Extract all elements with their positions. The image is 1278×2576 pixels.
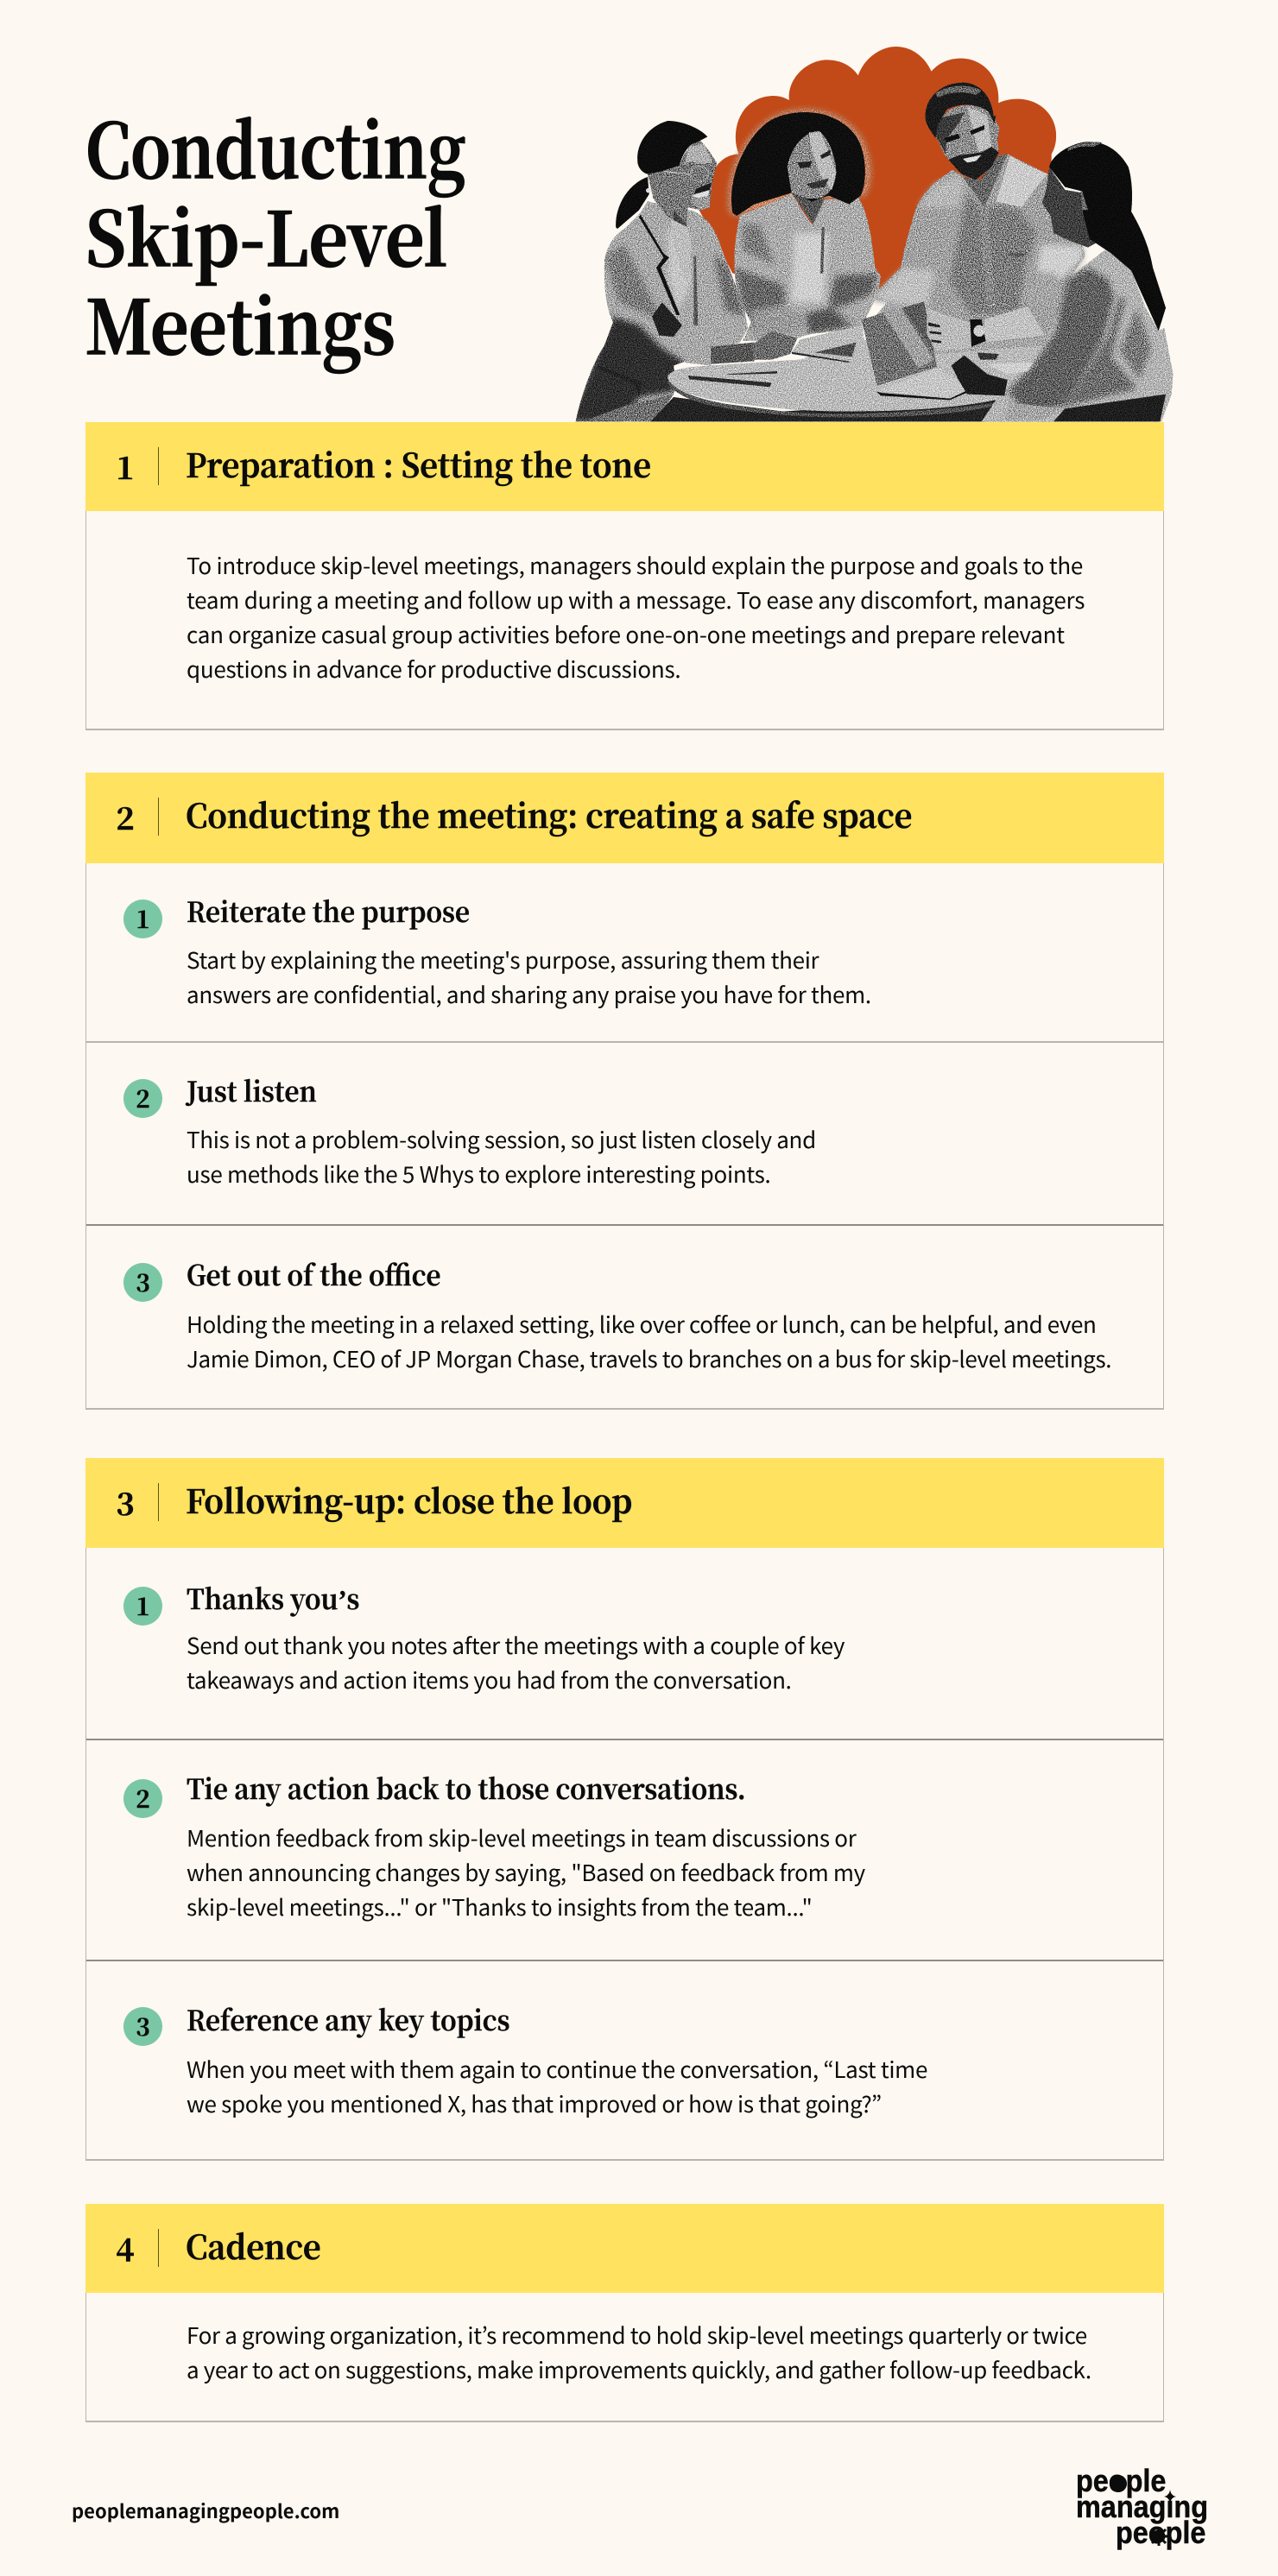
logo: people managing people: people	[1076, 2463, 1166, 2498]
section 2 header bar	[85, 773, 1164, 863]
fist and watch over table	[927, 308, 971, 351]
logo: people managing people: people	[1116, 2515, 1205, 2550]
illustration: four colleagues around a table with orange scalloped backdrop	[575, 47, 1173, 421]
item 3 text	[187, 1308, 1111, 1374]
section 3 number: 3	[116, 1481, 135, 1525]
badge 2: 2	[136, 1081, 150, 1115]
section 4 number: 4	[116, 2226, 135, 2270]
badge 3	[123, 1263, 162, 1302]
item 1 text: Send out thank you notes after the meetings with a couple of key	[187, 1629, 845, 1661]
item 3 title: Reference any key topics	[187, 1999, 509, 2039]
item 1 text: answers are confidential, and sharing any praise you have for them.	[187, 978, 871, 1010]
item 3 text: we spoke you mentioned X, has that improved or how is that going?”	[187, 2087, 882, 2119]
section 1 body box	[85, 508, 1164, 730]
panel: section 3 following up	[85, 1458, 1164, 2161]
badge 2	[123, 1779, 162, 1818]
left woman	[570, 121, 748, 421]
section 4 body box	[85, 2290, 1164, 2422]
section 1 heading: Preparation : Setting the tone	[186, 439, 651, 487]
item 2 text: use methods like the 5 Whys to explore interesting points.	[187, 1158, 770, 1190]
panel: section 2 conducting the meeting	[85, 773, 1164, 1410]
table	[650, 301, 1053, 421]
section 4 header bar	[85, 2204, 1164, 2293]
section 4 text: a year to act on suggestions, make improvements quickly, and gather follow-up feedback.	[187, 2353, 1091, 2385]
item 2 text: when announcing changes by saying, "Based on feedback from my	[187, 1856, 865, 1888]
item 1 title: Reiterate the purpose	[187, 891, 470, 931]
badge 3: 3	[136, 1265, 150, 1299]
item 2 text: This is not a problem-solving session, so just listen closely and	[187, 1123, 816, 1155]
section 4 text	[187, 2319, 1091, 2385]
badge 1	[123, 900, 162, 938]
chair highlight	[587, 395, 674, 421]
man in shirt	[870, 83, 1085, 351]
item 1 text: takeaways and action items you had from the conversation.	[187, 1664, 792, 1695]
item 3 text: Jamie Dimon, CEO of JP Morgan Chase, travels to branches on a bus for skip-level meetings.	[187, 1342, 1111, 1374]
section 4 text: For a growing organization, it’s recommend to hold skip-level meetings quarterly or twice	[187, 2319, 1087, 2351]
item 3 text: When you meet with them again to continue the conversation, “Last time	[187, 2053, 927, 2085]
badge 2: 2	[136, 1781, 150, 1815]
section 3 header bar	[85, 1458, 1164, 1548]
forearm and hand of left woman	[685, 331, 719, 365]
section 4 heading: Cadence	[186, 2221, 320, 2269]
title: Skip-Level	[85, 180, 447, 287]
item 1 text	[187, 944, 871, 1010]
section 2 heading: Conducting the meeting: creating a safe space	[186, 790, 912, 837]
logo: people managing people: managing	[1076, 2489, 1208, 2524]
small tablet	[792, 325, 866, 362]
badge 1: 1	[136, 1588, 150, 1623]
item 2 text	[187, 1123, 816, 1190]
curly haired woman	[729, 110, 881, 341]
section 1 header bar	[85, 422, 1164, 511]
badge 1	[123, 1587, 162, 1626]
title	[85, 92, 465, 376]
photo of the four people	[570, 83, 1173, 421]
badge 3: 3	[136, 2009, 150, 2043]
panel: section 1 preparation	[85, 422, 1164, 730]
section 2 body box	[85, 859, 1164, 1410]
footer url: peoplemanagingpeople.com	[72, 2497, 339, 2524]
item 2 title: Just listen	[187, 1070, 317, 1110]
panel: section 4 cadence	[85, 2204, 1164, 2422]
item 3 text: Holding the meeting in a relaxed setting, like over coffee or lunch, can be helpful, and even	[187, 1308, 1097, 1340]
title: Meetings	[85, 268, 395, 376]
laptop	[876, 389, 970, 400]
section 1 text: questions in advance for productive discussions.	[187, 653, 680, 685]
title: Conducting	[85, 92, 465, 199]
clasped hands	[952, 356, 1008, 395]
section 1 text	[187, 549, 1085, 685]
section 3 body box	[85, 1544, 1164, 2161]
logo: people managing people	[1076, 2463, 1208, 2550]
item 3 text	[187, 2053, 927, 2119]
item 1 text	[187, 1629, 845, 1695]
badge 2	[123, 1079, 162, 1118]
item 2 text: Mention feedback from skip-level meetings in team discussions or	[187, 1822, 857, 1853]
section 3 heading: Following-up: close the loop	[186, 1475, 632, 1523]
section 1 text: To introduce skip-level meetings, managers should explain the purpose and goals to the	[187, 549, 1083, 581]
logo glyph marks	[1110, 2475, 1176, 2546]
woman seen from behind	[952, 142, 1173, 421]
badge 3	[123, 2007, 162, 2046]
section 1 text: can organize casual group activities before one-on-one meetings and prepare relevant	[187, 618, 1065, 650]
badge 1: 1	[136, 901, 150, 936]
item 3 title: Get out of the office	[187, 1254, 440, 1294]
item 1 text: Start by explaining the meeting's purpose, assuring them their	[187, 944, 819, 975]
section 1 number: 1	[116, 445, 135, 489]
item 1 title: Thanks you’s	[187, 1578, 359, 1618]
section 1 text: team during a meeting and follow up with a message. To ease any discomfort, managers	[187, 584, 1085, 616]
item 2 text: skip-level meetings..." or "Thanks to insights from the team..."	[187, 1891, 813, 1923]
pens	[688, 376, 771, 387]
section 2 number: 2	[116, 795, 135, 839]
item 2 text	[187, 1822, 865, 1923]
item 2 title: Tie any action back to those conversations.	[187, 1768, 746, 1808]
orange scalloped backdrop	[699, 47, 1056, 296]
